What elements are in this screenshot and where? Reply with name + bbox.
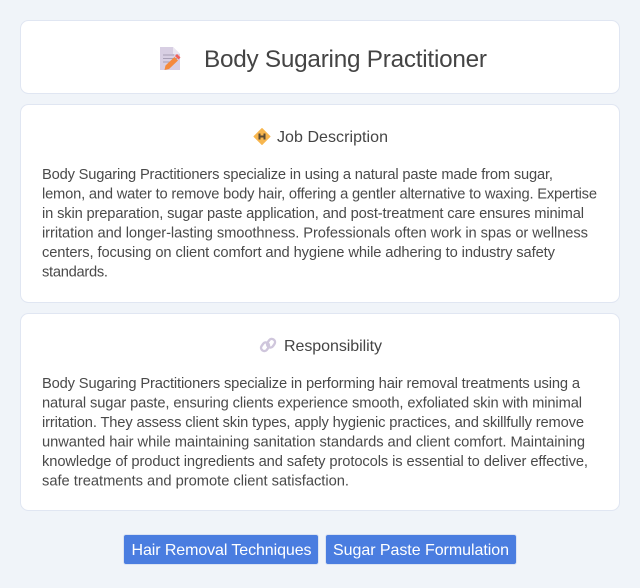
tag: hair removal techniques: Hair Removal Techniques — [132, 542, 312, 559]
text block: job description: centers, focusing on client comfort and hygiene while adhering to industry safety — [42, 245, 556, 261]
text block: job description: Body Sugaring Practitioners specialize in using a natural paste made from sugar, — [42, 167, 553, 183]
text block: responsibility: natural sugar paste, ensuring clients experience smooth, exfoliated skin with minimal — [42, 395, 582, 411]
panel: title card — [20, 20, 620, 94]
text block: job description: lemon, and water to remove body hair, offering a gentler alternative to waxing. Expertise — [42, 186, 597, 202]
text block: responsibility: unwanted hair while maintaining sanitation standards and client comfort. Maintaining — [42, 434, 585, 450]
text block: job description: irritation and longer-lasting smoothness. Professionals often work in spas or wellness — [42, 225, 588, 241]
heading: responsibility: Responsibility — [284, 338, 382, 355]
text block: job description: standards. — [42, 264, 108, 280]
text block: responsibility: safe treatments and promote client satisfaction. — [42, 473, 349, 489]
text block: responsibility: knowledge of product ingredients and safety protocols is essential to deliver effective, — [42, 454, 588, 470]
icon: document with pencil — [160, 47, 180, 70]
heading: job description: Job Description — [277, 129, 388, 146]
text block: responsibility: Body Sugaring Practitioners specialize in performing hair removal treatments using a — [42, 376, 581, 392]
text block: job description — [42, 167, 597, 280]
tag: sugar paste formulation — [326, 534, 516, 564]
panel: job description — [20, 104, 620, 302]
tag: sugar paste formulation: Sugar Paste Formulation — [333, 542, 509, 559]
panel: responsibility — [20, 314, 620, 510]
text block: responsibility: irritation. They assess client skin types, apply hygienic practices, and skillfully remove — [42, 415, 584, 431]
text block: responsibility — [42, 376, 588, 489]
heading: title: Body Sugaring Practitioner — [204, 46, 487, 73]
icon: orange diamond sign — [254, 128, 270, 144]
icon: chain link — [260, 338, 276, 352]
text block: job description: in skin preparation, sugar paste application, and post-treatment care ensures minimal — [42, 206, 584, 222]
tag: hair removal techniques — [124, 534, 318, 564]
